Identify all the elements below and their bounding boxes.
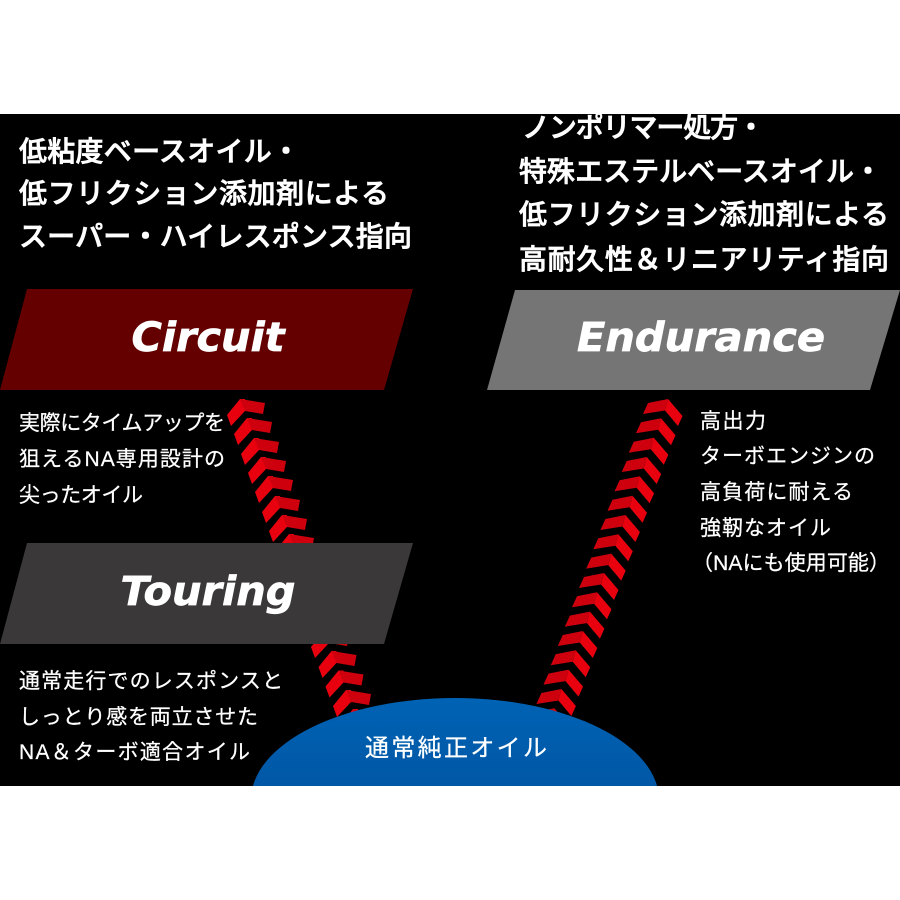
heading: Circuit description	[19, 136, 412, 252]
text: Endurance details: 強靭なオイル	[700, 517, 831, 540]
text: Endurance details: 高出力	[700, 410, 766, 433]
heading: Circuit description: 低粘度ベースオイル・	[19, 136, 300, 167]
panel: Touring: Touring	[120, 569, 296, 615]
text: Circuit details: 実際にタイムアップを	[19, 412, 225, 435]
panel: Endurance: Endurance	[577, 315, 825, 361]
text: Endurance details: ターボエンジンの	[700, 445, 875, 468]
text: Circuit details: 尖ったオイル	[19, 484, 143, 507]
text: Endurance details: 高負荷に耐える	[700, 481, 853, 504]
text: Touring details	[19, 670, 283, 764]
black board	[0, 114, 900, 786]
text: Circuit details	[19, 412, 225, 507]
text: Touring details: NA＆ターボ適合オイル	[19, 741, 250, 764]
heading: Circuit description: 低フリクション添加剤による	[19, 178, 389, 209]
heading: Endurance description: 特殊エステルベースオイル・	[519, 156, 882, 187]
heading: Endurance description: ノンポリマー処方・	[522, 112, 765, 143]
arrow: chevrons from base oil to Endurance	[536, 399, 682, 716]
panel: Circuit: Circuit	[132, 315, 286, 361]
heading: Endurance description: 高耐久性＆リニアリティ指向	[519, 244, 889, 275]
text: Endurance details: （NAにも使用可能）	[692, 552, 890, 575]
text: Endurance details	[700, 410, 876, 572]
text: Touring details: 通常走行でのレスポンスと	[19, 670, 283, 693]
arrow: chevrons from base oil to Circuit	[227, 399, 371, 717]
text: Touring details: しっとり感を両立させた	[19, 706, 258, 729]
panel: Touring	[0, 543, 413, 644]
text: Circuit details: 狙えるNA専用設計の	[19, 448, 225, 471]
panel: Circuit	[0, 289, 413, 390]
heading: Circuit description: スーパー・ハイレスポンス指向	[19, 221, 412, 252]
base oil dome	[253, 698, 657, 786]
heading: Endurance description	[519, 112, 889, 275]
heading: Endurance description: 低フリクション添加剤による	[519, 199, 889, 230]
base oil dome: 通常純正オイル	[365, 735, 547, 762]
panel: Endurance	[487, 290, 900, 390]
